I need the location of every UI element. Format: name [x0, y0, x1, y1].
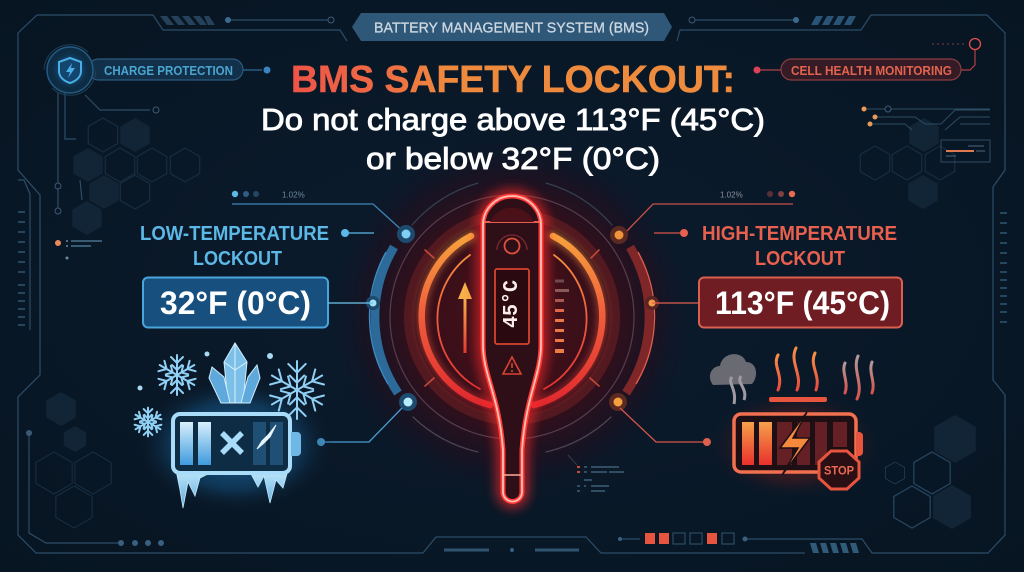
high temperature heading: [702, 223, 897, 270]
status squares: [645, 533, 734, 544]
gauge nodes: [366, 225, 659, 411]
up arrow: [458, 282, 472, 353]
high temperature connector top: 1.02%: [720, 190, 743, 200]
low temperature connector top: 1.02%: [282, 190, 305, 200]
thermometer sensor ring: [497, 235, 527, 254]
title: Do not charge above 113°F (45°C): [261, 102, 765, 137]
arc: hot side: [626, 247, 655, 393]
high temperature connector top: [625, 190, 795, 237]
thermometer: [483, 196, 541, 502]
thermometer digital display: 45°C: [501, 280, 524, 328]
badge: charge protection: CHARGE PROTECTION: [104, 64, 233, 78]
battery body: [173, 414, 290, 473]
title: BMS SAFETY LOCKOUT:: [291, 59, 735, 101]
low temperature value box: [143, 278, 328, 328]
smoke cloud: [710, 354, 756, 404]
right mini chart box: [941, 140, 990, 162]
low temperature connector top: [232, 190, 405, 237]
arc: cold side: [369, 247, 398, 393]
top ribbon: Battery Management System: [352, 13, 672, 41]
hexagon decoration: [36, 118, 976, 529]
cold battery illustration: [133, 343, 335, 513]
badge: cell health monitoring: [754, 38, 980, 80]
stop sign: STOP: [824, 464, 854, 478]
high temperature value box: [699, 278, 902, 328]
ice crystals: [209, 343, 260, 403]
high temperature heading: HIGH-TEMPERATURE: [702, 223, 897, 245]
level bars: [555, 280, 569, 353]
hot battery illustration: [707, 348, 883, 500]
stop sign: [819, 451, 859, 489]
low temperature heading: LOW-TEMPERATURE: [140, 223, 329, 245]
gauge rings: [390, 183, 634, 452]
central red glow: [327, 132, 697, 502]
low temperature value box: 32°F (0°C): [160, 285, 311, 321]
low temperature heading: [140, 223, 329, 270]
icicles: [176, 470, 288, 508]
icon: warning triangle: [503, 357, 521, 374]
high temperature value box: 113°F (45°C): [715, 285, 890, 321]
high temperature heading: LOCKOUT: [755, 248, 845, 270]
top ribbon: Battery Management System: BATTERY MANAGEMENT SYSTEM (BMS): [374, 20, 649, 36]
badge: cell health monitoring: CELL HEALTH MONITORING: [791, 64, 952, 78]
right circuit traces: [862, 106, 990, 130]
snowflakes: [133, 352, 326, 436]
icon: shield with bolt: [59, 58, 81, 83]
heat waves: [776, 348, 873, 399]
badge: charge protection: [44, 45, 270, 95]
battery body: [734, 414, 856, 472]
low temperature heading: LOCKOUT: [193, 248, 282, 270]
connectors to value boxes and batteries: [317, 303, 711, 446]
lightning bolt: [780, 412, 810, 475]
heat plate: [769, 397, 827, 402]
title: [261, 59, 765, 176]
thermometer digital display: [495, 269, 529, 344]
left mini data readout: [55, 240, 102, 260]
title: or below 32°F (0°C): [366, 141, 660, 176]
center mini legend: [568, 455, 624, 491]
